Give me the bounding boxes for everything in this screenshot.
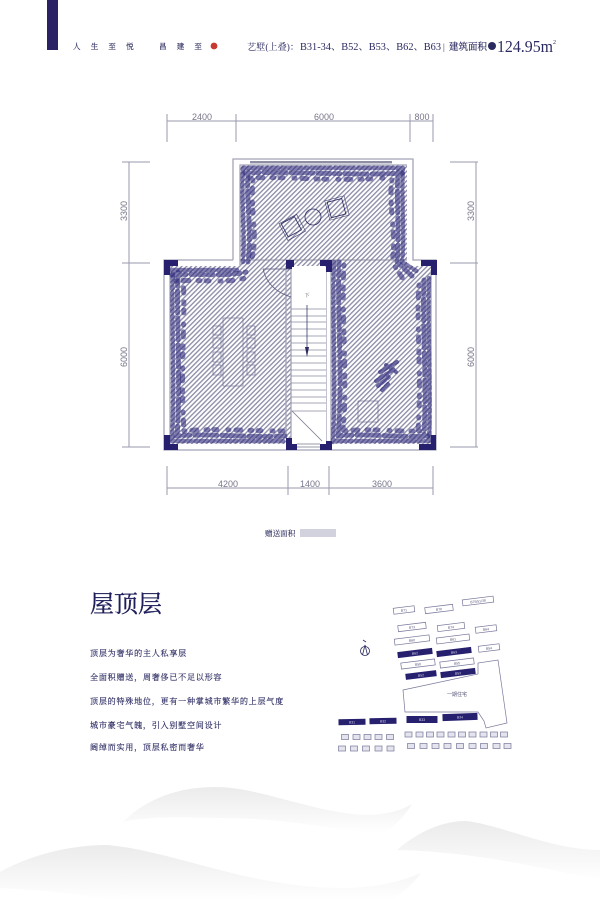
header accent bar [47,0,58,50]
outlined buildings: B60 [409,638,415,643]
outlined buildings: B71 [401,608,407,613]
structural columns [164,260,437,450]
townhouse rows [338,732,511,751]
dining table and chairs [213,318,378,422]
highlighted buildings: B31 [349,720,355,725]
unit type and area: 124.95m [497,37,553,56]
unit type and area: 艺墅(上叠)： [247,41,299,52]
stair well: 下 [304,292,310,299]
legend: gifted area: 赠送面积 [265,528,296,538]
walls [164,159,436,450]
site key map [338,596,511,751]
terrace table and chairs [279,196,349,241]
right dimensions [450,162,478,447]
outlined buildings: B54 [486,646,492,651]
outlined buildings: B50 [415,662,421,667]
outlined buildings: B75/51/38 [470,599,486,604]
hatched terrace floor [170,165,431,444]
highlighted buildings: B62 [412,651,418,656]
compass [360,640,370,656]
residential tower [403,660,507,728]
outlined buildings [393,596,500,669]
bottom dimensions: 1400 [300,479,320,489]
outlined buildings: B64 [483,627,489,632]
background waves [0,787,600,900]
outlined buildings: B61 [450,637,456,642]
roof planting [172,168,430,442]
unit type and area: B31-34、B52、B53、B62、B63 [300,42,441,53]
slogan: 昌建至 [159,41,212,51]
unit type and area: | [443,42,445,52]
description: 全面积赠送，周奢侈已不足以形容 [90,672,222,683]
top dimensions [167,112,433,142]
highlighted buildings: B32 [380,719,386,724]
stair well [291,267,326,447]
top dimensions: 6000 [314,112,334,122]
unit type and area: 2 [553,40,556,46]
bottom dimensions: 3600 [372,479,392,489]
outlined buildings: B70 [436,607,442,612]
right dimensions: 6000 [466,347,476,367]
description: 顶层的特殊地位，更有一种掌城市繁华的上层气度 [90,696,284,707]
title: 屋顶层 [90,591,162,618]
top dimensions: 2400 [192,112,212,122]
outlined buildings: B55 [454,661,460,666]
highlighted buildings: B52 [418,673,424,678]
highlighted buildings: B53 [455,671,461,676]
bottom dimensions: 4200 [218,479,238,489]
left dimensions: 3300 [119,201,129,221]
door swing [263,269,291,297]
highlighted buildings: B33 [419,718,425,722]
left dimensions [119,162,150,447]
legend: gifted area [265,528,336,538]
residential tower: 一期住宅 [447,691,467,698]
highlighted buildings: B34 [457,715,463,720]
left dimensions: 6000 [119,347,129,367]
right dimensions: 3300 [466,201,476,221]
outlined buildings: B74 [448,625,454,630]
description: 顶层为奢华的主人私享层 [90,648,187,658]
highlighted buildings: B63 [451,650,457,655]
top dimensions: 800 [414,112,430,122]
highlighted buildings [338,647,478,725]
slogan [73,41,217,51]
description: 城市豪宅气魄，引入别墅空间设计 [90,720,222,731]
outlined buildings: B73 [409,625,415,630]
description [90,648,284,753]
unit type and area [247,37,556,56]
bottom dimensions [167,466,433,495]
floor plan [119,112,478,495]
unit type and area: 建筑面积 [449,41,488,53]
description: 阔绰而实用，顶层私密而奢华 [90,742,205,753]
slogan: 人生至悦 [73,41,144,51]
